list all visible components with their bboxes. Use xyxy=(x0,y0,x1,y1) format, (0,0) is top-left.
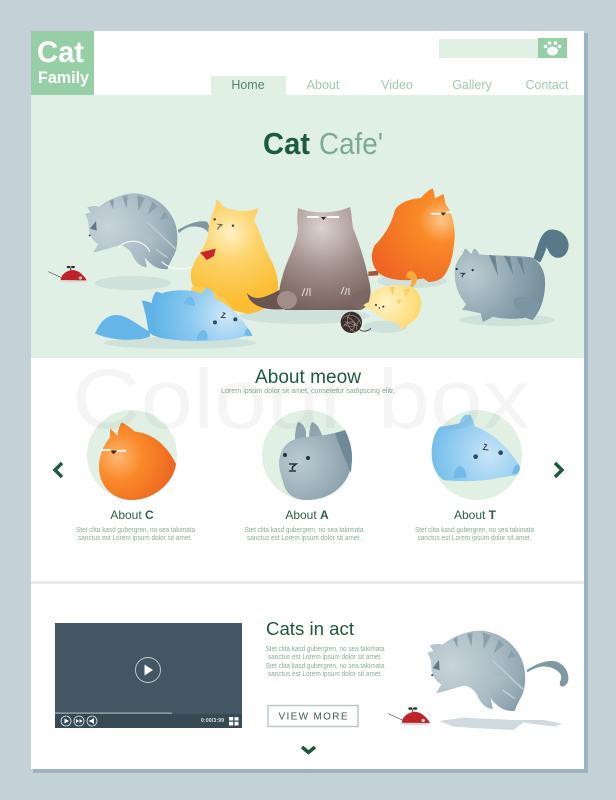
card: about C xyxy=(76,410,195,542)
section heading: about meow: About meow xyxy=(255,367,361,388)
section heading: about meow: Lorem ipsum dolor sit amet, consetetur sadipscing elitr, xyxy=(221,386,395,395)
card: about T: About T xyxy=(454,508,497,522)
navigation bar: Contact xyxy=(525,78,569,92)
cat: small yellow kitten xyxy=(363,271,421,329)
card: about C: About C xyxy=(110,508,154,522)
cat: yellow sitting xyxy=(191,199,278,314)
card: about T xyxy=(415,410,534,542)
header: logo: Family xyxy=(38,68,90,87)
navigation bar: About xyxy=(307,78,340,92)
cat shadow: lower section xyxy=(439,718,562,730)
search box with paw icon xyxy=(439,38,567,58)
section text: cats in act: Cats in act xyxy=(266,618,354,639)
ground shadows xyxy=(95,274,555,349)
cat: orange sitting xyxy=(368,188,455,282)
card: about C: Stet clita kasd gubergren, no sea takimata xyxy=(76,527,195,534)
cat: grey jumping, lower section xyxy=(427,631,568,711)
card: about T: Stet clita kasd gubergren, no sea takimata xyxy=(415,527,534,534)
cat: grey jumping xyxy=(85,193,210,269)
watermark: Colour box xyxy=(72,352,530,446)
left arrow xyxy=(55,463,62,477)
hero title: Cat xyxy=(263,126,310,161)
card: about A: sanctus est Lorem ipsum dolor sit amet. xyxy=(247,535,361,542)
hero title xyxy=(263,126,383,161)
navigation bar: Home xyxy=(231,78,265,92)
card: about C: sanctus est Lorem ipsum dolor sit amet. xyxy=(78,535,192,542)
view more button xyxy=(268,706,358,726)
section text: cats in act: sanctus est Lorem ipsum dolor sit amet. xyxy=(268,671,382,678)
yarn ball xyxy=(341,312,371,333)
section heading: about meow xyxy=(221,367,395,395)
card: about T: sanctus est Lorem ipsum dolor sit amet. xyxy=(418,535,532,542)
card: about A xyxy=(244,410,364,542)
cat: brown sitting xyxy=(247,207,371,310)
right arrow xyxy=(555,463,562,477)
view more button: VIEW MORE xyxy=(278,712,348,722)
hero title: Cafe' xyxy=(319,126,383,161)
section text: cats in act: Stet clita kasd gubergren, no sea takimata xyxy=(266,646,385,653)
cat: slate standing xyxy=(455,229,569,322)
section text: cats in act: sanctus est Lorem ipsum dolor sit amet. xyxy=(268,654,382,661)
header: logo: Cat xyxy=(37,36,84,69)
cat: blue lying xyxy=(95,287,253,341)
navigation bar: Video xyxy=(381,78,413,92)
section divider xyxy=(31,581,584,584)
down chevron xyxy=(302,747,315,752)
toy mouse xyxy=(48,266,87,282)
card: about A: About A xyxy=(285,508,329,522)
navigation bar: Gallery xyxy=(452,78,493,92)
video player xyxy=(55,623,242,728)
card: about A: Stet clita kasd gubergren, no sea takimata xyxy=(244,527,364,534)
section text: cats in act: Stet clita kasd gubergren, no sea takimata xyxy=(266,663,385,670)
header: logo xyxy=(31,31,94,95)
section text: cats in act xyxy=(266,618,385,678)
hero panel xyxy=(31,95,584,358)
navigation bar xyxy=(211,76,569,95)
video player: 0:00/3:99 xyxy=(201,718,224,724)
toy mouse, lower section xyxy=(388,707,430,725)
